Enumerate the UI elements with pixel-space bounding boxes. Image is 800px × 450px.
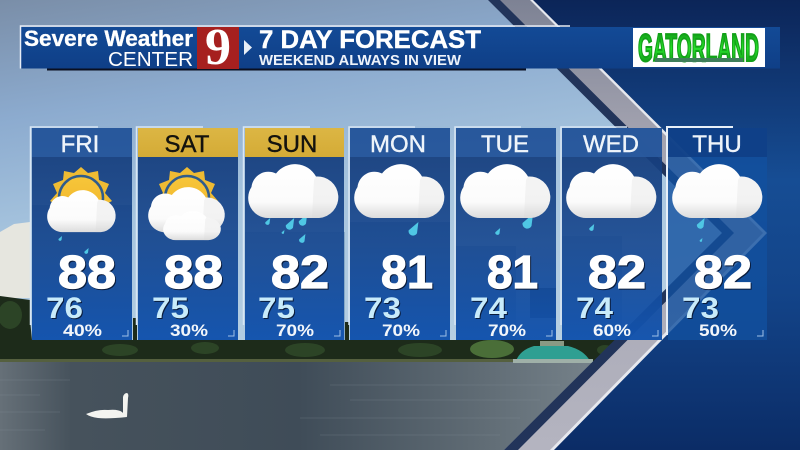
day header xyxy=(32,128,132,158)
low temperature: 74 xyxy=(576,292,613,325)
day header xyxy=(350,128,450,158)
day header xyxy=(562,128,662,158)
panel body xyxy=(668,128,767,340)
low temperature: 75 xyxy=(152,292,189,325)
panel: MON xyxy=(349,127,450,340)
precipitation chance: 50% xyxy=(699,321,737,340)
panel: SUN xyxy=(244,127,344,340)
icon: rain cloud xyxy=(354,164,444,236)
precipitation chance: 30% xyxy=(170,321,208,340)
title bar xyxy=(20,19,780,76)
high temperature: 82 xyxy=(271,246,329,298)
panel: TUE xyxy=(455,127,556,340)
icon: rain cloud xyxy=(460,164,550,235)
precipitation chance: 40% xyxy=(63,321,102,340)
panel: FRI xyxy=(30,127,132,340)
brand: Severe Weather Center: Severe Weather xyxy=(24,26,193,51)
brand: Severe Weather Center: CENTER xyxy=(108,49,193,71)
panel body xyxy=(456,128,556,340)
frame accent xyxy=(136,127,203,325)
day header: SUN xyxy=(267,131,317,158)
day header: TUE xyxy=(481,131,529,158)
low temperature: 76 xyxy=(46,292,83,325)
day header: FRI xyxy=(61,131,99,158)
lake water xyxy=(0,362,596,450)
low temperature: 74 xyxy=(470,292,507,325)
panel body xyxy=(245,128,344,340)
icon: rain cloud xyxy=(248,164,338,243)
day header xyxy=(138,128,238,158)
icon: mostly cloudy xyxy=(148,167,225,240)
subheading: WEEKEND ALWAYS IN VIEW xyxy=(259,52,462,69)
frame accent xyxy=(561,127,627,325)
day header: THU xyxy=(692,131,742,158)
high temperature: 88 xyxy=(58,246,116,298)
brand: Severe Weather Center xyxy=(24,26,193,71)
skyline buildings xyxy=(32,205,622,340)
precipitation chance: 70% xyxy=(488,321,526,340)
panel: SAT xyxy=(136,127,238,340)
white tower at left xyxy=(0,222,30,298)
day header: SAT xyxy=(165,131,210,158)
panel body xyxy=(32,128,132,340)
precipitation chance: 70% xyxy=(382,321,420,340)
icon: partly sunny xyxy=(47,167,116,254)
day header xyxy=(456,128,556,158)
high temperature: 82 xyxy=(694,246,752,298)
heading: 7 DAY FORECAST xyxy=(259,26,481,54)
high temperature: 81 xyxy=(487,246,538,298)
logo: channel 9: 9 xyxy=(205,19,231,76)
precipitation chance: 60% xyxy=(593,321,631,340)
day header xyxy=(245,128,344,158)
frame accent xyxy=(667,127,733,335)
arrow xyxy=(244,40,252,55)
panel body xyxy=(138,128,238,340)
day header: WED xyxy=(583,131,639,158)
frame accent xyxy=(30,127,98,325)
frame accent xyxy=(244,127,310,325)
low temperature: 75 xyxy=(258,292,295,325)
logo: channel 9 xyxy=(197,19,239,76)
high temperature: 81 xyxy=(381,246,433,298)
high temperature: 88 xyxy=(164,246,223,298)
frame accent xyxy=(349,127,415,325)
fountain pavilion xyxy=(513,341,593,363)
panel body xyxy=(350,128,450,340)
day header xyxy=(668,128,767,158)
high temperature: 82 xyxy=(588,246,646,298)
icon: rain cloud xyxy=(566,164,656,231)
frame accent xyxy=(455,127,521,325)
panel: THU xyxy=(667,127,767,340)
low temperature: 73 xyxy=(364,292,401,325)
low temperature: 73 xyxy=(682,292,719,325)
chevron band xyxy=(488,0,767,450)
panel: WED xyxy=(561,127,662,340)
tree line xyxy=(0,296,618,362)
day header: MON xyxy=(370,131,426,158)
icon: rain cloud xyxy=(672,164,762,242)
panel body xyxy=(562,128,662,340)
precipitation chance: 70% xyxy=(276,321,314,340)
swan xyxy=(86,393,128,418)
